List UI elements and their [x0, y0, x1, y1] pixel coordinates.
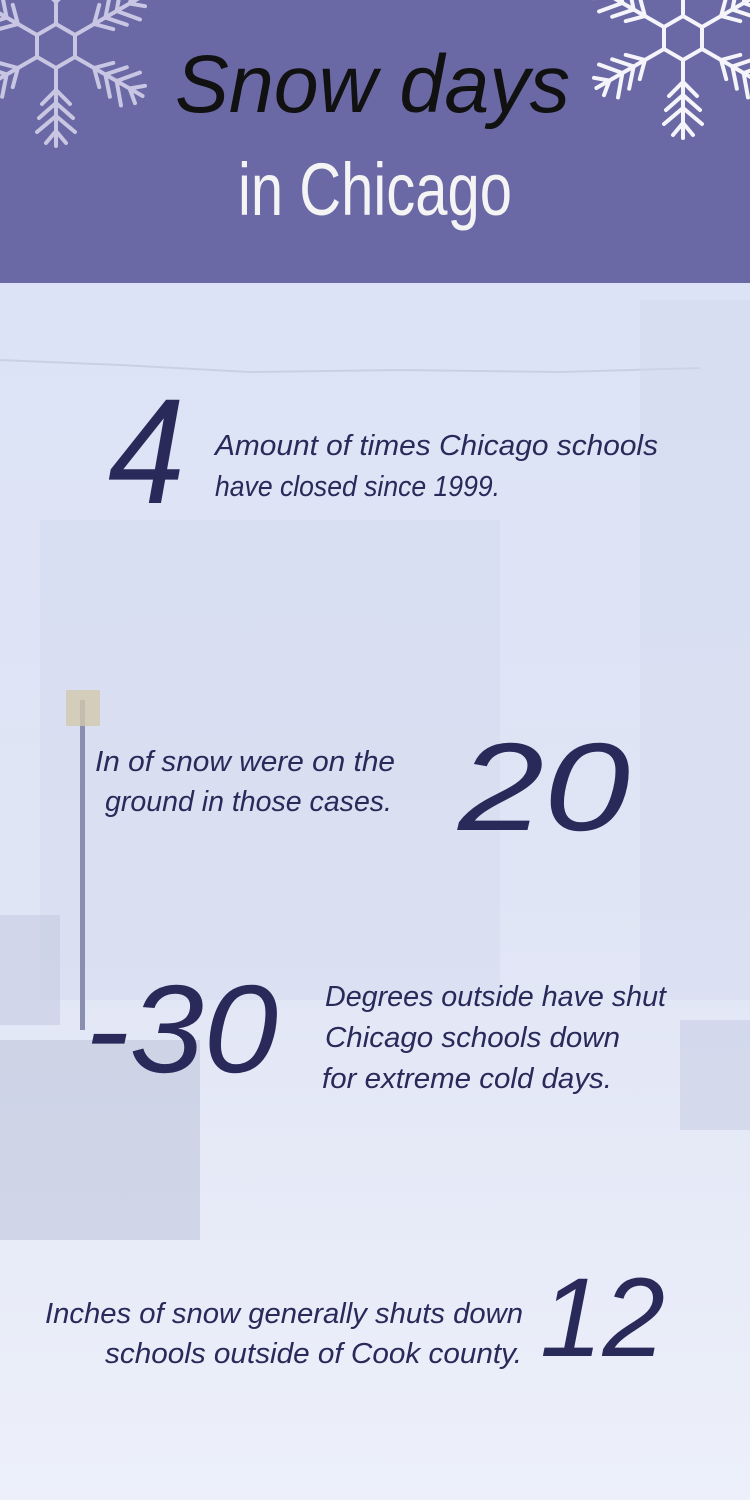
stat 1: Amount of times Chicago schools	[213, 430, 658, 462]
stat 2: 20	[457, 718, 630, 857]
stat 3: -30	[85, 960, 278, 1099]
title: Snow days	[175, 39, 570, 130]
stat 3: for extreme cold days.	[322, 1063, 612, 1095]
stat 2: ground in those cases.	[105, 786, 392, 818]
header banner	[0, 0, 750, 283]
icon: snowflake right	[587, 0, 750, 138]
stat 4: Inches of snow generally shuts down	[45, 1298, 523, 1330]
stat 3: Degrees outside have shut	[325, 981, 668, 1013]
subtitle: in Chicago	[238, 148, 512, 231]
stat 1: 4	[108, 367, 185, 535]
stat 1	[108, 367, 658, 535]
stat 2	[95, 718, 630, 857]
stat 3: Chicago schools down	[325, 1022, 620, 1054]
stat 3	[85, 960, 668, 1099]
stat 2: In of snow were on the	[95, 746, 395, 778]
stat 4: 12	[540, 1255, 665, 1380]
stat 4	[45, 1255, 665, 1380]
stat 4: schools outside of Cook county.	[105, 1338, 522, 1370]
icon: snowflake left	[0, 0, 152, 146]
stat 1: have closed since 1999.	[215, 471, 500, 503]
